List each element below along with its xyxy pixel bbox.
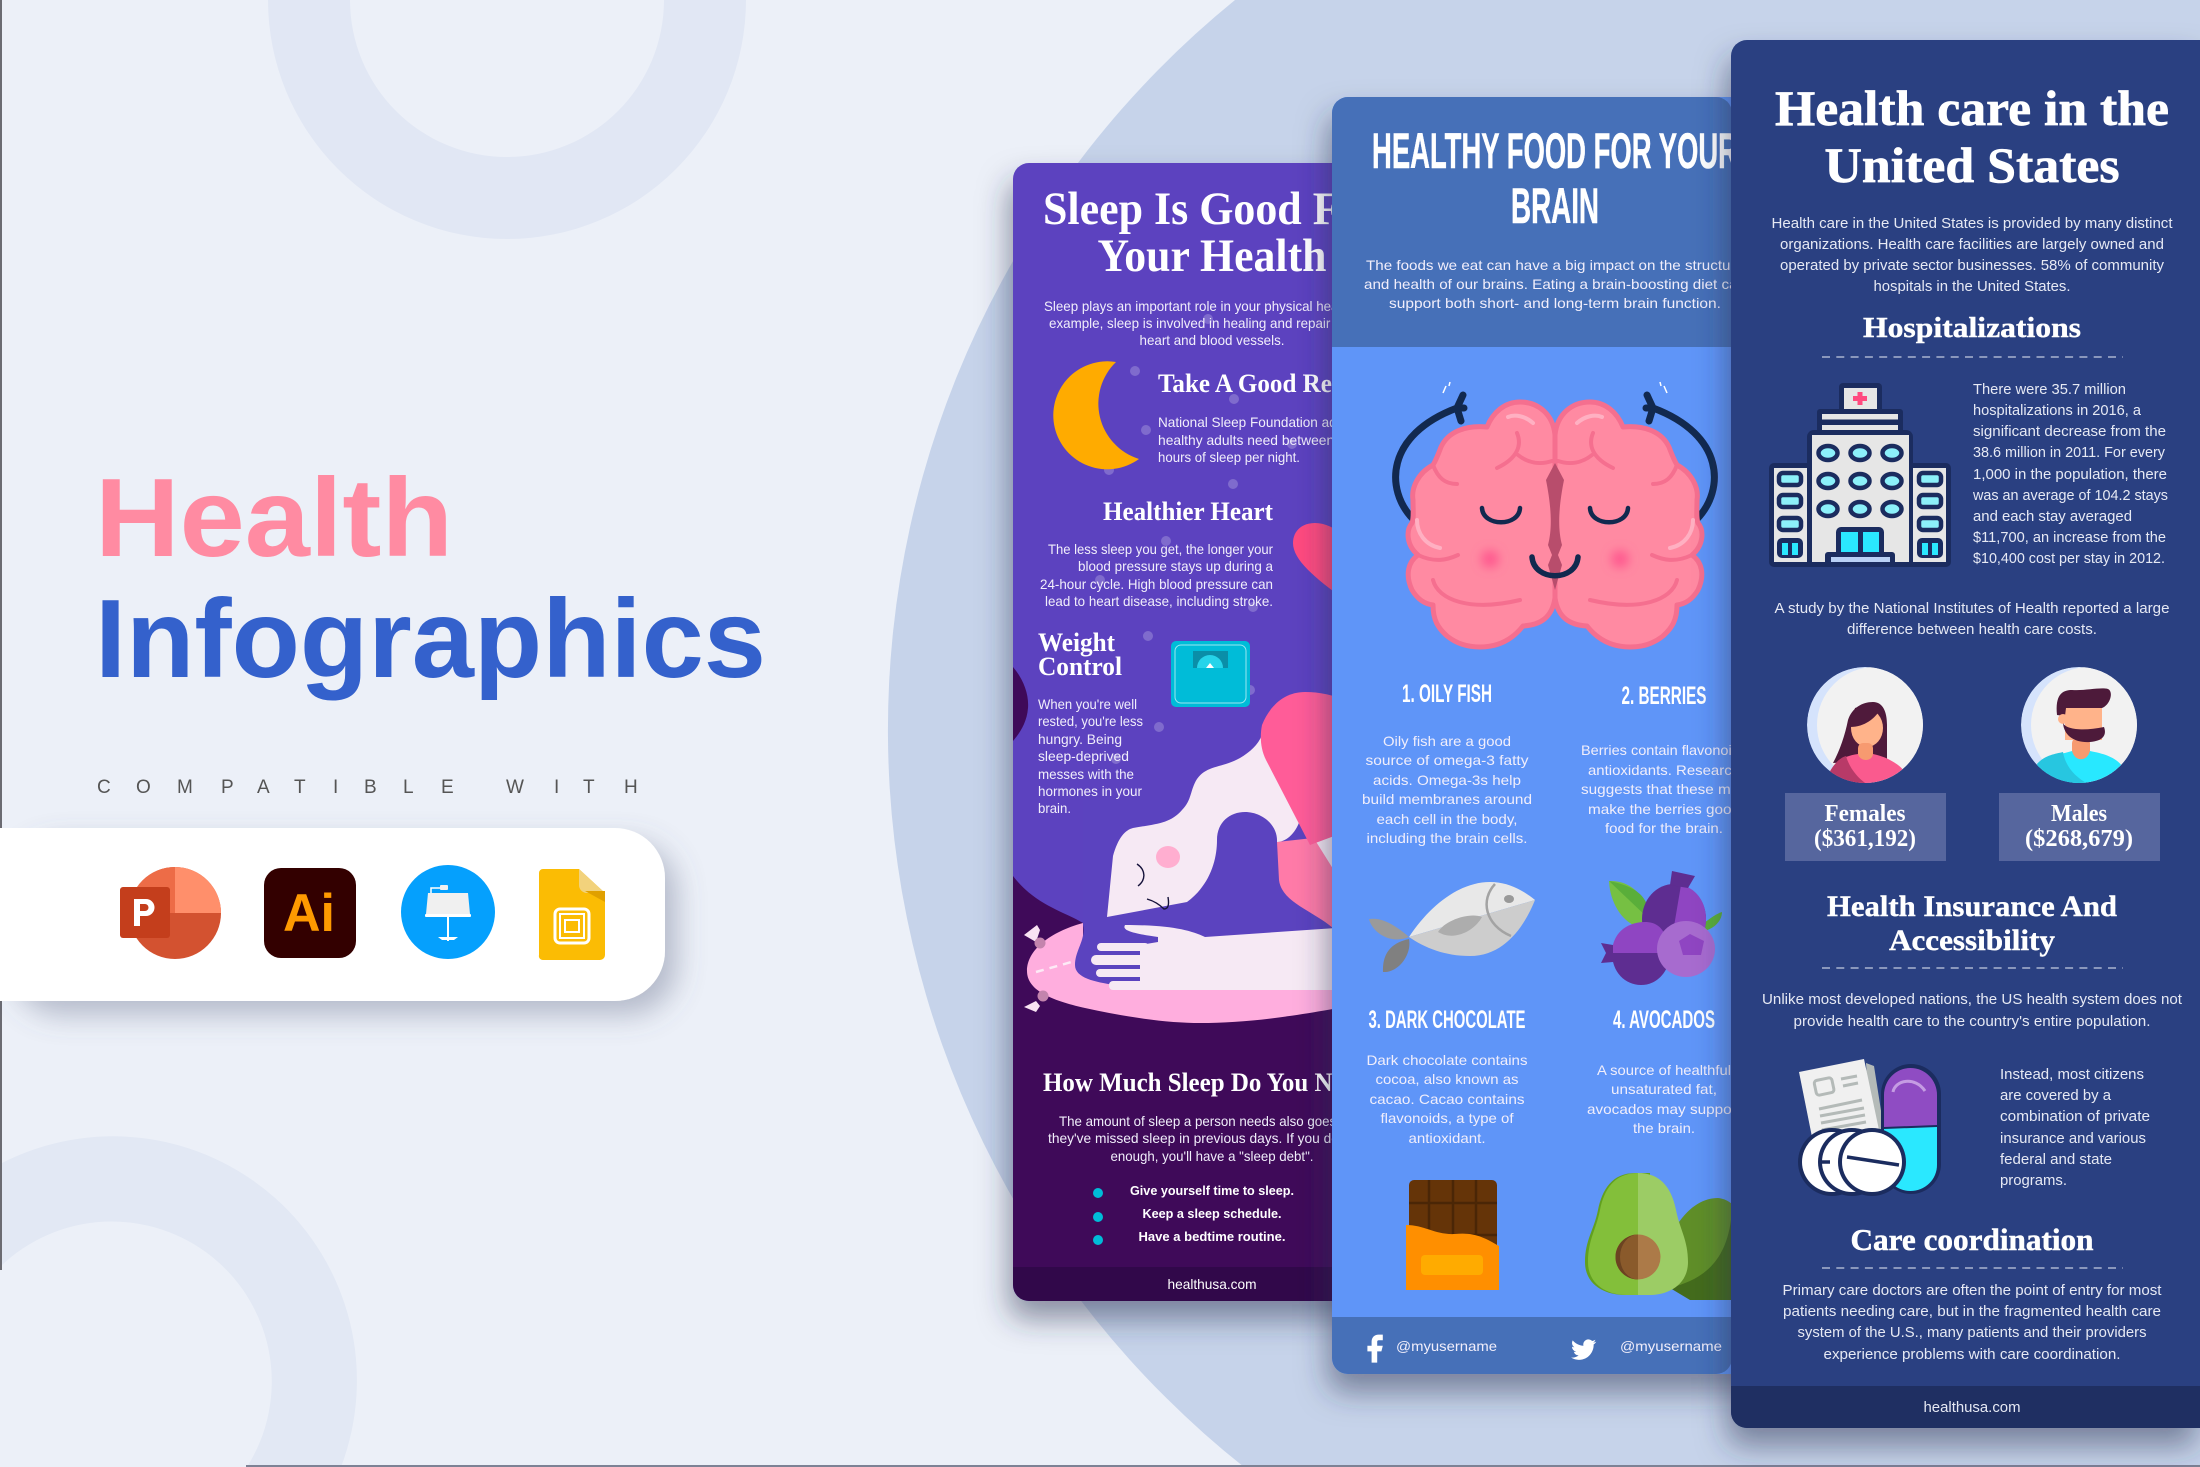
- panel: healthy food card: [1332, 97, 1772, 1377]
- bullet list: [1093, 1184, 1294, 1245]
- hospitalizations text: significant decrease from the: [1973, 423, 2166, 440]
- hospitalizations text: 38.6 million in 2011. For every: [1973, 444, 2165, 461]
- label: males: Males: [2051, 801, 2107, 827]
- insurance side text: Instead, most citizens: [2000, 1066, 2144, 1083]
- section: how much sleep do you need: they've missed sleep in previous days. If you don't get: [1048, 1130, 1376, 1146]
- item: avocados: [1587, 1006, 1741, 1136]
- insurance side text: programs.: [2000, 1172, 2067, 1189]
- icon: heart: [1293, 523, 1345, 600]
- icon: twitter: [1571, 1339, 1596, 1360]
- item: berries: 2. BERRIES: [1622, 682, 1706, 710]
- care coordination text: experience problems with care coordination.: [1824, 1346, 2120, 1363]
- header and footer bands: [1332, 97, 1732, 1377]
- footer: social handles: @myusername: [1396, 1338, 1497, 1354]
- title: [95, 456, 766, 701]
- section: weight control: [1038, 628, 1143, 816]
- intro text: operated by private sector businesses. 58% of community: [1780, 257, 2164, 274]
- panel: sleep infographic card: [1013, 163, 1394, 1307]
- label: males: ($268,679): [2025, 826, 2133, 852]
- icon: Illustrator: Ai: [283, 884, 335, 943]
- section: weight control: Control: [1038, 652, 1122, 681]
- item: oily fish: including the brain cells.: [1366, 830, 1528, 846]
- bullet list: Give yourself time to sleep.: [1130, 1184, 1294, 1198]
- top decorative ring: [268, 0, 746, 239]
- footer: social handles: @myusername: [1620, 1338, 1722, 1354]
- heading: health insurance and accessibility: Health Insurance And: [1827, 890, 2117, 923]
- item: berries: suggests that these may: [1581, 781, 1747, 797]
- heading: healthy food for your brain: HEALTHY FOOD FOR YOUR: [1372, 123, 1738, 179]
- icon: berries: [1601, 871, 1722, 985]
- icon: documents and pills: [1798, 1059, 1941, 1196]
- icon: Keynote: [401, 865, 495, 959]
- illustration: smiling brain: [1396, 382, 1714, 647]
- section: take a good rest: hours of sleep per night.: [1158, 449, 1300, 465]
- icon: crescent moon: [1053, 361, 1139, 469]
- hospitalizations text: hospitalizations in 2016, a: [1973, 402, 2142, 419]
- label: females: ($361,192): [1814, 826, 1916, 852]
- section: weight control: rested, you're less: [1038, 713, 1143, 729]
- icon: facebook: [1367, 1335, 1383, 1363]
- title: Health: [95, 456, 453, 580]
- hospitalizations text: There were 35.7 million: [1973, 381, 2126, 398]
- care coordination text: patients needing care, but in the fragmented health care: [1783, 1303, 2161, 1320]
- item: oily fish: build membranes around: [1362, 791, 1532, 807]
- bottom decorative ring: [0, 1136, 357, 1467]
- item: avocados: avocados may support: [1587, 1101, 1741, 1117]
- insurance side text: combination of private: [2000, 1108, 2150, 1125]
- study text: A study by the National Institutes of Health reported a large: [1774, 600, 2170, 617]
- item: oily fish: Oily fish are a good: [1383, 733, 1511, 749]
- intro text: support both short- and long-term brain function.: [1389, 295, 1721, 311]
- icon: Google Slides: [539, 869, 605, 960]
- title: Infographics: [95, 577, 766, 701]
- bullet list: Have a bedtime routine.: [1138, 1230, 1286, 1244]
- section: take a good rest: Take A Good Rest: [1158, 369, 1350, 398]
- insurance side text: [2000, 1066, 2150, 1189]
- item: dark chocolate: 3. DARK CHOCOLATE: [1368, 1006, 1526, 1034]
- section: weight control: Weight: [1038, 628, 1115, 657]
- heading: health insurance and accessibility: Accessibility: [1889, 924, 2055, 957]
- item: dark chocolate: cocoa, also known as: [1376, 1071, 1518, 1087]
- care coordination text: system of the U.S., many patients and their providers: [1798, 1324, 2146, 1341]
- item: dark chocolate: [1366, 1006, 1528, 1146]
- care coordination text: [1782, 1282, 2162, 1363]
- section: healthier heart: [1040, 497, 1273, 609]
- footer url: healthusa.com: [1924, 1399, 2020, 1416]
- intro text: [1772, 215, 2173, 295]
- intro text: Sleep plays an important role in your physical health. For: [1044, 298, 1380, 314]
- hospitalizations text: and each stay averaged: [1973, 508, 2132, 525]
- sleep illustration: [1013, 667, 1332, 1301]
- hospitalizations text: [1972, 381, 2168, 567]
- avatar: female: [1807, 667, 1923, 783]
- decorative dots: [1095, 314, 1297, 764]
- intro text: heart and blood vessels.: [1140, 332, 1284, 348]
- section: take a good rest: [1158, 369, 1394, 465]
- panel: software icons: [0, 828, 665, 1001]
- intro text: [1044, 298, 1380, 348]
- heading: sleep is good for your health: [1043, 183, 1381, 282]
- item: berries: food for the brain.: [1605, 820, 1723, 836]
- icon: fish: [1369, 882, 1535, 972]
- intro text: organizations. Health care facilities are largely owned and: [1780, 236, 2164, 253]
- section: how much sleep do you need: How Much Sleep Do You Need?: [1043, 1068, 1381, 1097]
- panel: health care in the united states card: [1731, 40, 2200, 1428]
- section: weight control: messes with the: [1038, 766, 1134, 782]
- item: dark chocolate: antioxidant.: [1408, 1130, 1486, 1146]
- heading: healthy food for your brain: BRAIN: [1511, 178, 1599, 234]
- item: oily fish: acids. Omega-3s help: [1373, 772, 1521, 788]
- item: berries: [1581, 682, 1747, 836]
- heading: health care in the united states: [1775, 80, 2169, 193]
- section: how much sleep do you need: The amount of sleep a person needs also goes up if: [1059, 1113, 1365, 1129]
- insurance text: Unlike most developed nations, the US health system does not: [1762, 991, 2183, 1008]
- section: how much sleep do you need: enough, you'll have a "sleep debt".: [1110, 1148, 1314, 1164]
- section: healthier heart: The less sleep you get, the longer your: [1048, 541, 1273, 557]
- insurance side text: are covered by a: [2000, 1087, 2112, 1104]
- intro text: [1364, 257, 1746, 311]
- item: berries: make the berries good: [1588, 801, 1740, 817]
- bullet list: Keep a sleep schedule.: [1142, 1207, 1282, 1221]
- section: take a good rest: healthy adults need between 7-9: [1158, 432, 1358, 448]
- hospitalizations text: was an average of 104.2 stays: [1972, 487, 2168, 504]
- section: take a good rest: National Sleep Foundation advises that: [1158, 414, 1394, 430]
- item: oily fish: each cell in the body,: [1376, 811, 1518, 827]
- section: how much sleep do you need: [1043, 1068, 1381, 1164]
- insurance text: [1762, 991, 2183, 1030]
- heading: health insurance and accessibility: [1827, 890, 2117, 957]
- item: oily fish: source of omega-3 fatty: [1366, 752, 1528, 768]
- item: oily fish: 1. OILY FISH: [1402, 680, 1492, 708]
- item: oily fish: [1362, 680, 1532, 846]
- compatible with label: COMPATIBLE WITH: [97, 777, 638, 798]
- label: females: Females: [1824, 801, 1906, 827]
- large background circle: [888, 0, 2200, 1467]
- heading: health care in the united states: Health care in the: [1775, 80, 2169, 136]
- heading: care coordination: Care coordination: [1850, 1222, 2094, 1257]
- insurance side text: insurance and various: [2000, 1130, 2146, 1147]
- heading: sleep is good for your health: Sleep Is Good For: [1043, 183, 1381, 235]
- section: weight control: sleep-deprived: [1038, 748, 1129, 764]
- heading: hospitalizations: Hospitalizations: [1863, 312, 2081, 344]
- intro text: hospitals in the United States.: [1874, 278, 2070, 295]
- icon: Illustrator: [264, 868, 356, 958]
- section: weight control: When you're well: [1038, 696, 1137, 712]
- heading: healthy food for your brain: [1372, 123, 1738, 234]
- hospitalizations text: $10,400 cost per stay in 2012.: [1973, 550, 2165, 567]
- item: berries: Berries contain flavonoids: [1581, 742, 1747, 758]
- icon: hospital: [1769, 383, 1951, 567]
- item: dark chocolate: Dark chocolate contains: [1366, 1052, 1528, 1068]
- item: dark chocolate: cacao. Cacao contains: [1370, 1091, 1524, 1107]
- item: avocados: the brain.: [1633, 1120, 1695, 1136]
- intro text: The foods we eat can have a big impact on the structure: [1366, 257, 1744, 273]
- section: weight control: hormones in your: [1038, 783, 1142, 799]
- section: weight control: brain.: [1038, 800, 1071, 816]
- study text: difference between health care costs.: [1847, 621, 2097, 638]
- item: avocados: 4. AVOCADOS: [1613, 1006, 1715, 1034]
- heading: health care in the united states: United States: [1824, 137, 2120, 193]
- item: avocados: A source of healthful: [1597, 1062, 1731, 1078]
- avatar: male: [2021, 667, 2137, 783]
- footer: social handles: [1367, 1335, 1722, 1363]
- study text: [1774, 600, 2170, 638]
- section: healthier heart: blood pressure stays up during a: [1078, 558, 1273, 574]
- footer band: [1731, 1386, 2200, 1428]
- insurance side text: federal and state: [2000, 1151, 2112, 1168]
- item: dark chocolate: flavonoids, a type of: [1380, 1110, 1514, 1126]
- intro text: Health care in the United States is provided by many distinct: [1772, 215, 2173, 232]
- heading: sleep is good for your health: Your Health: [1098, 230, 1326, 282]
- footer url: healthusa.com: [1168, 1276, 1256, 1292]
- section: weight control: hungry. Being: [1038, 731, 1122, 747]
- icon: weighing scale: [1171, 641, 1250, 707]
- label: males: [1999, 793, 2160, 861]
- section: healthier heart: Healthier Heart: [1103, 497, 1273, 526]
- icon: avocados: [1585, 1173, 1760, 1300]
- section: healthier heart: 24-hour cycle. High blood pressure can: [1040, 576, 1273, 592]
- care coordination text: Primary care doctors are often the point of entry for most: [1782, 1282, 2162, 1299]
- hospitalizations text: $11,700, an increase from the: [1973, 529, 2166, 546]
- item: avocados: unsaturated fat,: [1611, 1081, 1717, 1097]
- intro text: and health of our brains. Eating a brain-boosting diet can: [1364, 276, 1746, 292]
- icon: chocolate bar: [1406, 1180, 1499, 1290]
- hospitalizations text: 1,000 in the population, there: [1973, 466, 2167, 483]
- icon: PowerPoint: [120, 867, 221, 959]
- label: females: [1785, 793, 1946, 861]
- intro text: example, sleep is involved in healing and repair of your: [1049, 315, 1375, 331]
- insurance text: provide health care to the country's entire population.: [1794, 1013, 2150, 1030]
- section: healthier heart: lead to heart disease, including stroke.: [1045, 593, 1273, 609]
- item: berries: antioxidants. Research: [1588, 762, 1740, 778]
